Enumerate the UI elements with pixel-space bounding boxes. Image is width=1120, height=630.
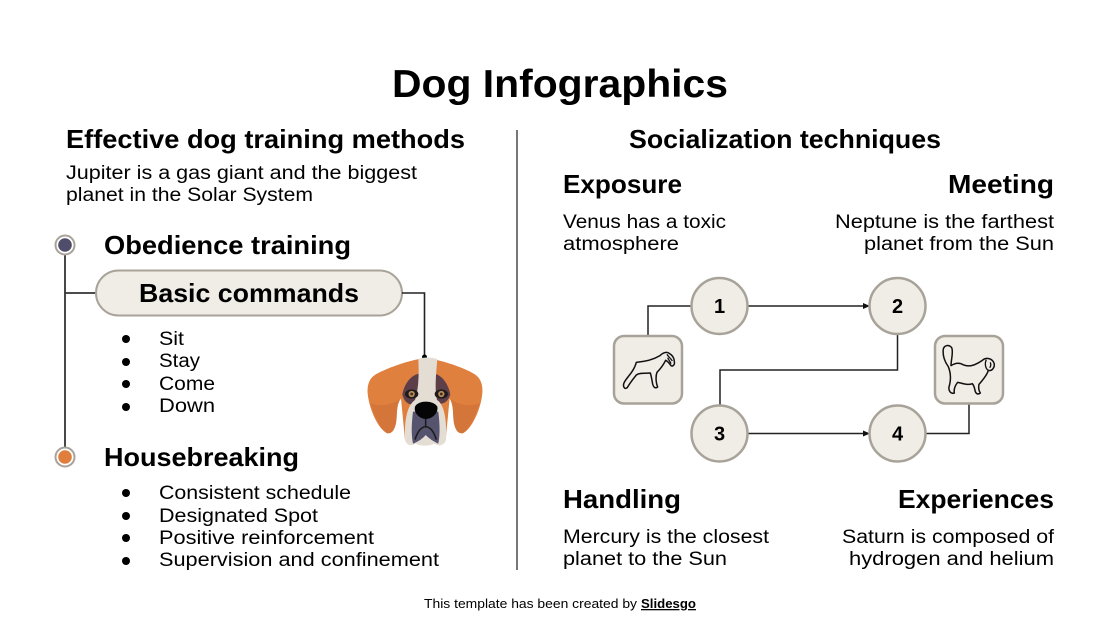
list: basic commands <box>122 329 215 417</box>
icon: standing dog <box>614 336 682 404</box>
block: handling: planet to the Sun <box>563 549 727 570</box>
list: housebreaking <box>122 483 440 571</box>
list: basic commands: Sit <box>159 329 185 350</box>
block: experiences <box>842 484 1055 570</box>
panel: training methods <box>56 124 482 571</box>
block: experiences: hydrogen and helium <box>849 549 1054 570</box>
nose <box>415 402 437 419</box>
block: handling <box>563 484 770 570</box>
panel: socialization techniques <box>563 124 1055 570</box>
step 1: 1 <box>714 296 725 318</box>
list: housebreaking: Supervision and confinement <box>159 550 440 571</box>
heading: housebreaking: Housebreaking <box>104 442 299 472</box>
marker: housebreaking <box>56 448 74 466</box>
block: meeting <box>835 169 1055 255</box>
block: exposure: atmosphere <box>563 234 679 255</box>
intro text: Jupiter is a gas giant and the biggest <box>66 163 418 184</box>
step 2: 2 <box>892 296 903 318</box>
icon: dog head <box>368 357 482 446</box>
step 1 <box>692 278 748 334</box>
block: meeting: Neptune is the farthest <box>835 212 1055 233</box>
block: experiences: Experiences <box>898 484 1054 514</box>
footer credit: Slidesgo <box>641 596 696 611</box>
block: experiences: Saturn is composed of <box>842 527 1055 548</box>
arrowheads <box>863 303 870 436</box>
eye patches <box>402 374 420 404</box>
connector to dog head <box>402 293 427 360</box>
block: handling: Mercury is the closest <box>563 527 770 548</box>
title: Dog Infographics <box>392 63 728 106</box>
step 4 <box>870 406 926 462</box>
right ear and head side <box>426 359 482 440</box>
vertical divider <box>516 130 518 570</box>
jowls <box>412 412 440 444</box>
block: exposure: Exposure <box>563 169 682 199</box>
list: basic commands: Down <box>159 396 215 417</box>
block: meeting: Meeting <box>948 169 1054 199</box>
step 4: 4 <box>892 424 904 446</box>
step 2 <box>870 278 926 334</box>
flow connectors <box>648 306 969 434</box>
block: exposure: Venus has a toxic <box>563 212 726 233</box>
block: meeting: planet from the Sun <box>864 234 1054 255</box>
timeline connector <box>65 245 97 457</box>
eyes <box>405 389 418 399</box>
icon: fluffy dog <box>935 336 1003 404</box>
pill: basic commands <box>96 270 402 316</box>
intro text <box>66 163 418 206</box>
intro text: planet in the Solar System <box>66 185 313 206</box>
list: basic commands: Stay <box>159 351 201 372</box>
block: exposure <box>563 169 726 255</box>
heading: effective dog training methods: Effective dog training methods <box>66 124 465 154</box>
footer credit: This template has been created by <box>424 596 638 611</box>
step 3 <box>692 406 748 462</box>
left ear and head side <box>368 359 426 440</box>
heading: obedience training: Obedience training <box>104 230 351 260</box>
heading: socialization techniques: Socialization techniques <box>629 124 941 154</box>
list: basic commands: Come <box>159 374 215 395</box>
pill: basic commands: Basic commands <box>139 278 359 308</box>
list: housebreaking: Consistent schedule <box>159 483 351 504</box>
list: housebreaking: Designated Spot <box>159 506 319 527</box>
list: housebreaking: Positive reinforcement <box>159 528 375 549</box>
blaze and muzzle <box>405 357 446 446</box>
block: handling: Handling <box>563 484 681 514</box>
marker: obedience training <box>56 236 74 254</box>
step 3: 3 <box>714 424 725 446</box>
